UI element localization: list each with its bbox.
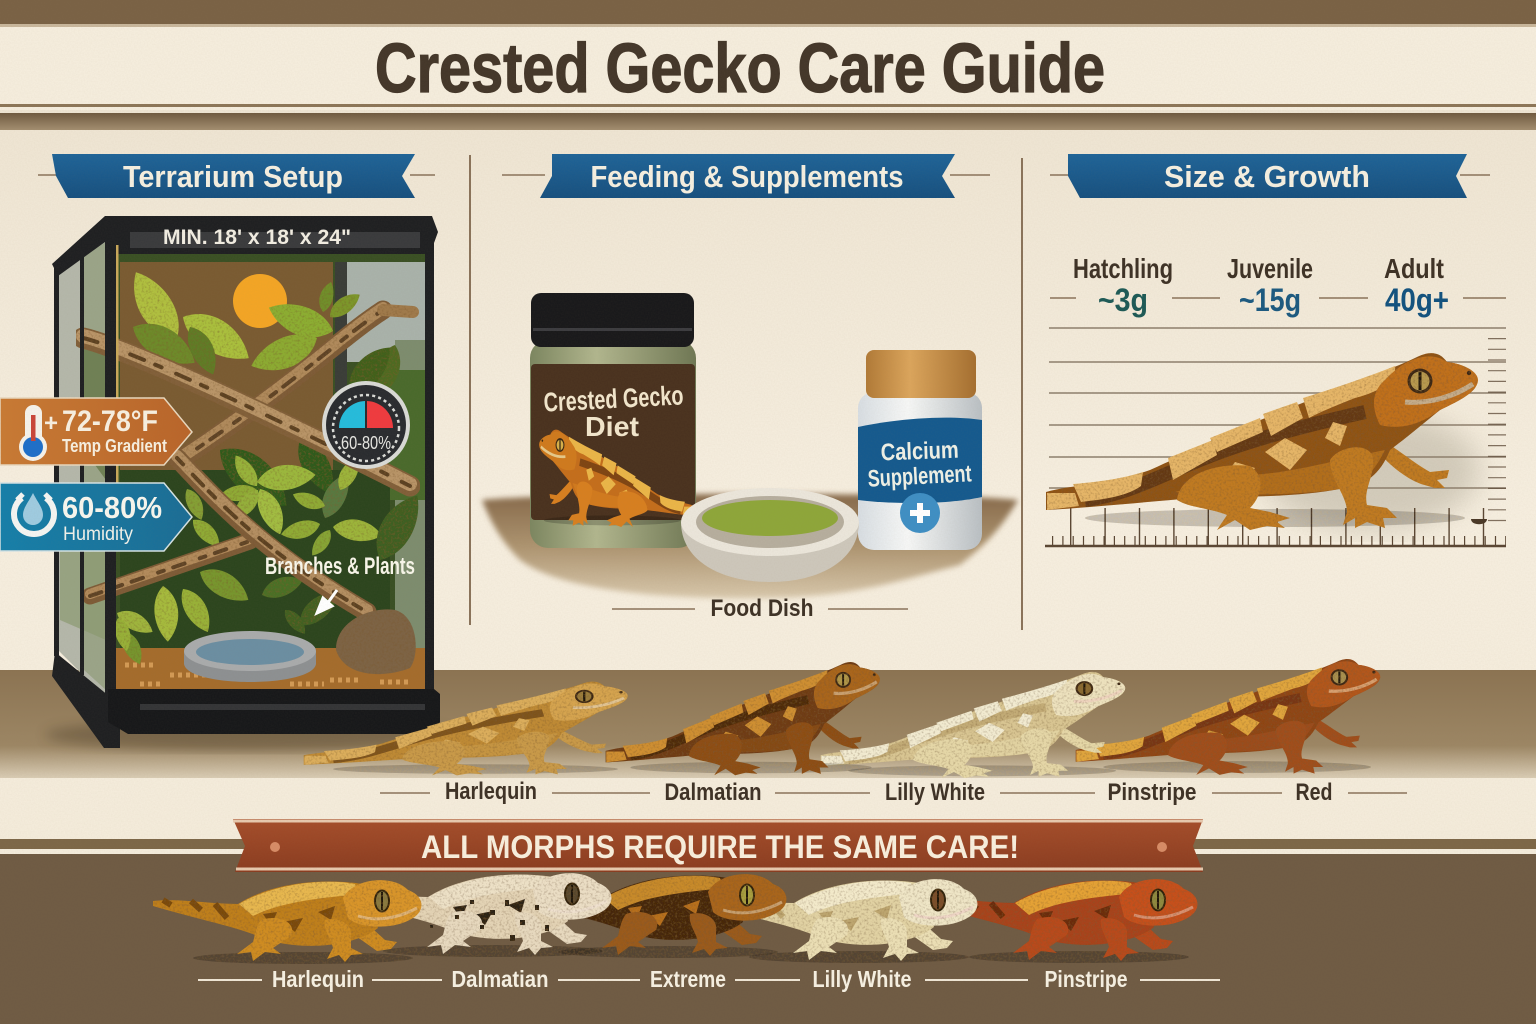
jar: Crested Gecko Diet: Diet: [585, 411, 639, 442]
morph row two labels: [198, 966, 1220, 992]
morph row one labels: Dalmatian: [664, 779, 762, 806]
ground band: [0, 670, 1536, 778]
substrate: [116, 648, 428, 692]
adult gecko: [1046, 353, 1478, 530]
section dividers: [469, 155, 1023, 630]
temperature badge: 72-78°F: [62, 405, 158, 438]
heading ribbon: Terrarium Setup: [38, 154, 435, 198]
humidity badge: Humidity: [63, 524, 133, 545]
size stages: Juvenile: [1227, 253, 1313, 284]
temperature badge: +: [44, 410, 58, 437]
morph row two labels: Extreme: [650, 966, 726, 992]
bottle: Calcium Supplement: [858, 350, 982, 550]
gecko: pinstripe: [929, 879, 1197, 963]
size stages: ~3g: [1098, 282, 1148, 318]
arrow to plants: [317, 590, 337, 613]
icon: ruler marker: [1471, 519, 1487, 524]
temperature badge: [0, 398, 192, 465]
foliage: [112, 264, 430, 667]
size stages: Hatchling: [1073, 253, 1173, 284]
gecko: harlequin: [304, 682, 628, 775]
terrarium illustration: [45, 216, 455, 751]
plants label: Branches & Plants: [265, 553, 415, 580]
soil patch: [482, 494, 1018, 598]
ruler: [1045, 338, 1506, 546]
gauge: [322, 381, 410, 469]
heading ribbon: Feeding & Supplements: [502, 154, 990, 198]
size label: MIN. 18' x 18' x 24": [163, 226, 351, 249]
banner: all morphs: [233, 819, 1203, 872]
morph row two labels: Pinstripe: [1044, 966, 1128, 992]
heading ribbon: Size & Growth: Size & Growth: [1164, 159, 1370, 194]
morph row two labels: Dalmatian: [452, 966, 548, 992]
jar: Crested Gecko Diet: [530, 293, 696, 548]
side glass pane: [58, 238, 108, 700]
interior back: [116, 250, 428, 695]
heading ribbon: Terrarium Setup: Terrarium Setup: [123, 159, 343, 194]
bottom brown panel: [0, 839, 1536, 1024]
size stages: [1050, 253, 1506, 318]
bottle: Calcium Supplement: Calcium: [880, 437, 959, 466]
gecko: dalmatian: [606, 662, 880, 775]
morph row one: [304, 659, 1380, 778]
frame: [52, 216, 440, 748]
gecko: lilly white: [709, 879, 977, 963]
glass highlight: [116, 245, 118, 545]
cork rock: [336, 609, 416, 674]
temperature badge: Temp Gradient: [62, 436, 167, 456]
gecko: dalmatian: [343, 873, 611, 957]
food dish label: Food Dish: [710, 595, 814, 622]
morph row one labels: Lilly White: [885, 779, 985, 806]
heading ribbon: Size & Growth: [1050, 154, 1490, 198]
icon: thermometer: [19, 405, 47, 461]
title: Crested Gecko Care Guide: [375, 29, 1105, 107]
morph row one labels: [380, 778, 1407, 806]
header band: [0, 0, 1536, 130]
gecko: red: [1076, 659, 1380, 775]
humidity badge: 60-80%: [62, 490, 162, 525]
gecko: harlequin: [153, 880, 421, 964]
jar: Crested Gecko Diet: Crested Gecko: [543, 380, 684, 418]
morph row two labels: Harlequin: [272, 966, 364, 992]
icon: water drop: [14, 493, 54, 534]
feeding illustration: [482, 293, 1018, 622]
size stages: 40g+: [1385, 282, 1449, 318]
morph row two labels: Lilly White: [812, 966, 912, 992]
food bowl: [681, 488, 859, 582]
water dish: [184, 631, 316, 682]
gecko: lilly white: [821, 672, 1125, 778]
size stages: ~15g: [1239, 282, 1301, 318]
dalmatian spots: [430, 900, 549, 941]
branches: [83, 308, 413, 612]
growth chart with adult gecko: [1045, 328, 1506, 546]
gauge: 60-80%: [341, 433, 391, 453]
gecko: extreme: [518, 874, 786, 958]
heading ribbon: Feeding & Supplements: Feeding & Supplements: [590, 159, 904, 194]
morph row one labels: Harlequin: [445, 778, 537, 805]
size stages: Adult: [1384, 253, 1444, 284]
morph row one labels: Red: [1296, 779, 1332, 806]
banner: all morphs: ALL MORPHS REQUIRE THE SAME CARE!: [421, 829, 1019, 865]
morph row one labels: Pinstripe: [1108, 779, 1196, 806]
bottle: Calcium Supplement: Supplement: [867, 460, 972, 493]
basking light: [233, 274, 287, 328]
humidity badge: [0, 483, 192, 551]
morph row two: [153, 873, 1197, 964]
